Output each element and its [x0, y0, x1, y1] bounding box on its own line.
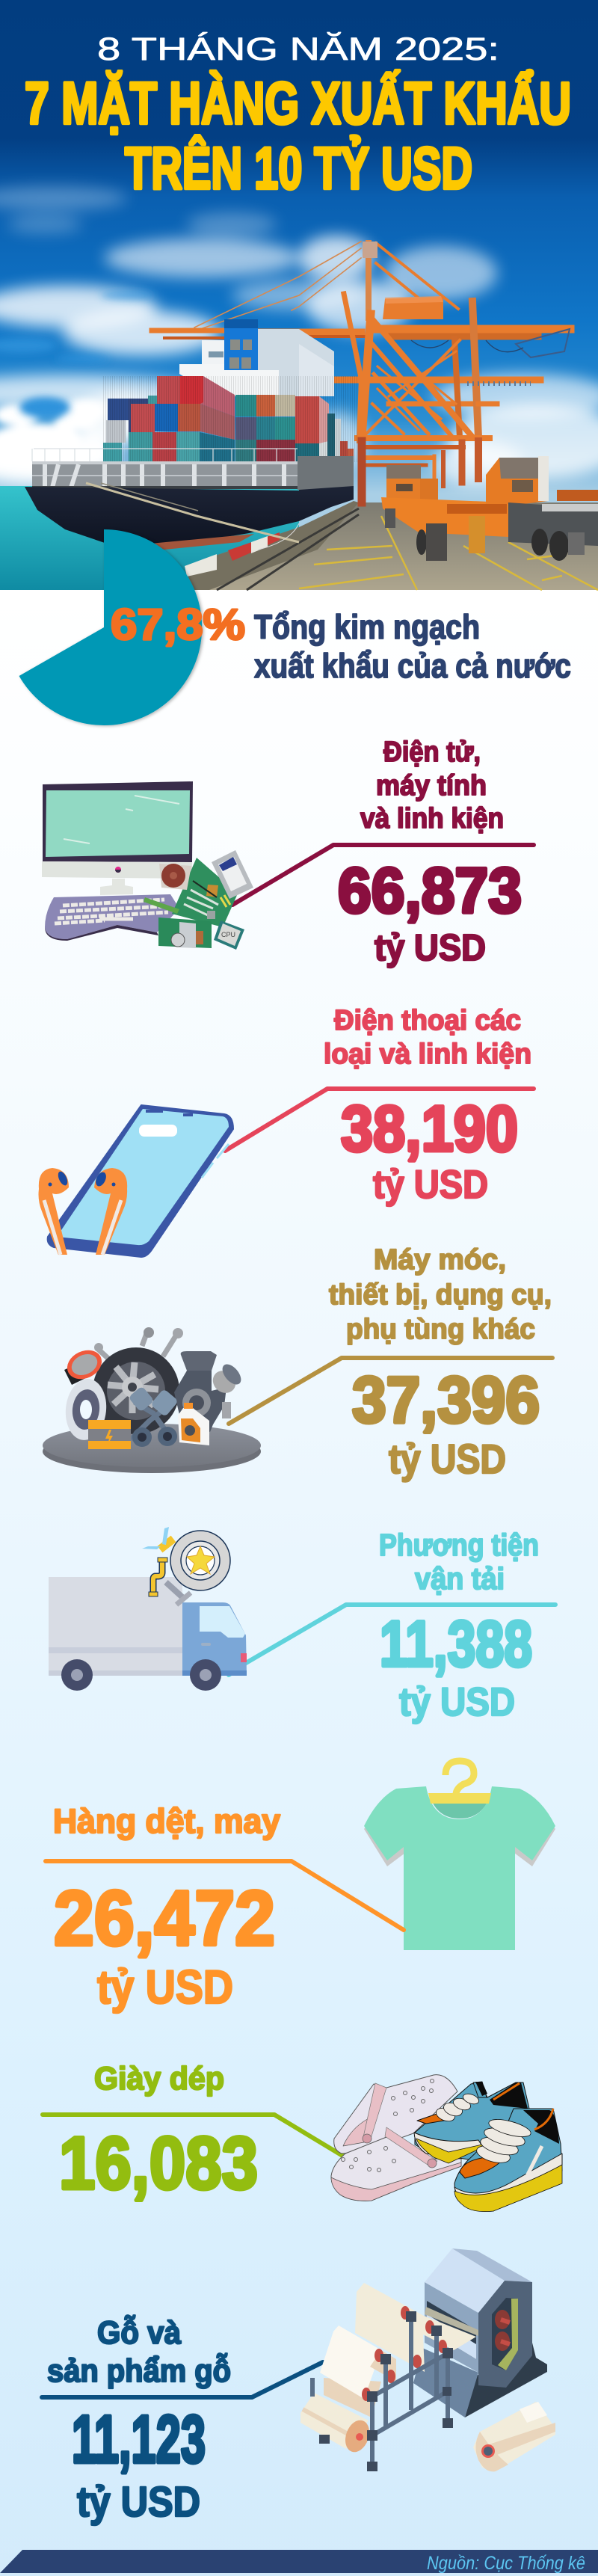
label: và linh kiện	[360, 803, 504, 834]
icon: truck with vehicle parts	[49, 1527, 247, 1691]
label: Phương tiện	[379, 1528, 539, 1562]
label	[324, 1005, 531, 1070]
label	[379, 1528, 539, 1596]
unit: tỷ USD	[97, 1961, 233, 2014]
title block	[25, 31, 571, 201]
value: 11,388	[380, 1608, 532, 1680]
value: 16,083	[59, 2121, 258, 2204]
connector line: electronics	[232, 845, 534, 905]
section: footwear	[59, 2061, 258, 2204]
section: wood	[47, 2314, 231, 2526]
containers	[103, 376, 357, 473]
connector line: machinery	[229, 1358, 552, 1424]
unit: tỷ USD	[399, 1680, 515, 1724]
label	[329, 1244, 552, 1345]
icon: t-shirt on a hanger	[364, 1761, 555, 1950]
icon: clogs and sneakers	[331, 2075, 562, 2212]
value: 26,472	[54, 1875, 275, 1962]
icon: computer and components: CPU	[221, 931, 235, 938]
label: Giày dép	[94, 2061, 224, 2097]
pie chart: 67,8%	[19, 529, 245, 725]
yellow lot markings	[299, 516, 598, 590]
orange trucks	[381, 456, 598, 561]
connector line: phones	[225, 1089, 534, 1151]
value: 38,190	[341, 1093, 518, 1165]
label: sản phẩm gỗ	[47, 2352, 231, 2389]
section: vehicles	[379, 1528, 539, 1724]
ship hull	[25, 486, 354, 547]
value: 11,123	[72, 2403, 206, 2477]
label	[360, 737, 504, 834]
icon: wood and paper processing machine	[300, 2248, 555, 2471]
label: thiết bị, dụng cụ,	[329, 1279, 552, 1311]
value: 66,873	[338, 855, 522, 926]
section: phones	[324, 1005, 531, 1207]
label: Hàng dệt, may	[53, 1802, 280, 1840]
footer source bar	[0, 2550, 598, 2574]
label: Máy móc,	[374, 1244, 506, 1276]
hero photo: container ship and port cranes	[0, 0, 598, 590]
connector line: footwear	[43, 2115, 351, 2161]
dock surface	[185, 502, 598, 590]
label: Điện thoại các	[334, 1005, 521, 1036]
section: machinery	[329, 1244, 552, 1482]
unit: tỷ USD	[373, 1163, 488, 1207]
label: Điện tử,	[383, 737, 481, 768]
crane structure	[152, 242, 570, 502]
label	[47, 2314, 231, 2389]
value: 37,396	[352, 1364, 540, 1436]
connector line: vehicles	[229, 1605, 555, 1675]
section: electronics	[338, 737, 522, 968]
label: máy tính	[376, 770, 487, 802]
label: phụ tùng khác	[346, 1314, 535, 1345]
unit: tỷ USD	[374, 928, 486, 968]
ship deck and railings	[32, 461, 298, 464]
icon: auto parts on a round platform	[43, 1327, 261, 1473]
label: Gỗ và	[97, 2314, 182, 2351]
section: textiles	[53, 1802, 280, 2014]
connector line: textiles	[46, 1861, 404, 1930]
icon: computer and components	[42, 781, 253, 950]
sea	[0, 486, 299, 590]
page background	[0, 590, 598, 2576]
unit: tỷ USD	[77, 2478, 200, 2526]
label: vận tải	[415, 1561, 505, 1596]
unit: tỷ USD	[389, 1436, 506, 1482]
percentage value: 67,8%	[111, 600, 245, 649]
pie caption: Tổng kim ngạch	[254, 608, 480, 646]
title block: TRÊN 10 TỶ USD	[125, 135, 472, 201]
label: loại và linh kiện	[324, 1039, 531, 1070]
pie caption	[254, 608, 571, 685]
connector line: wood	[42, 2362, 323, 2397]
icon: phone and earbuds	[39, 1105, 233, 1257]
subtitle: 8 THÁNG NĂM 2025:	[97, 31, 499, 67]
ship superstructure	[258, 329, 334, 396]
